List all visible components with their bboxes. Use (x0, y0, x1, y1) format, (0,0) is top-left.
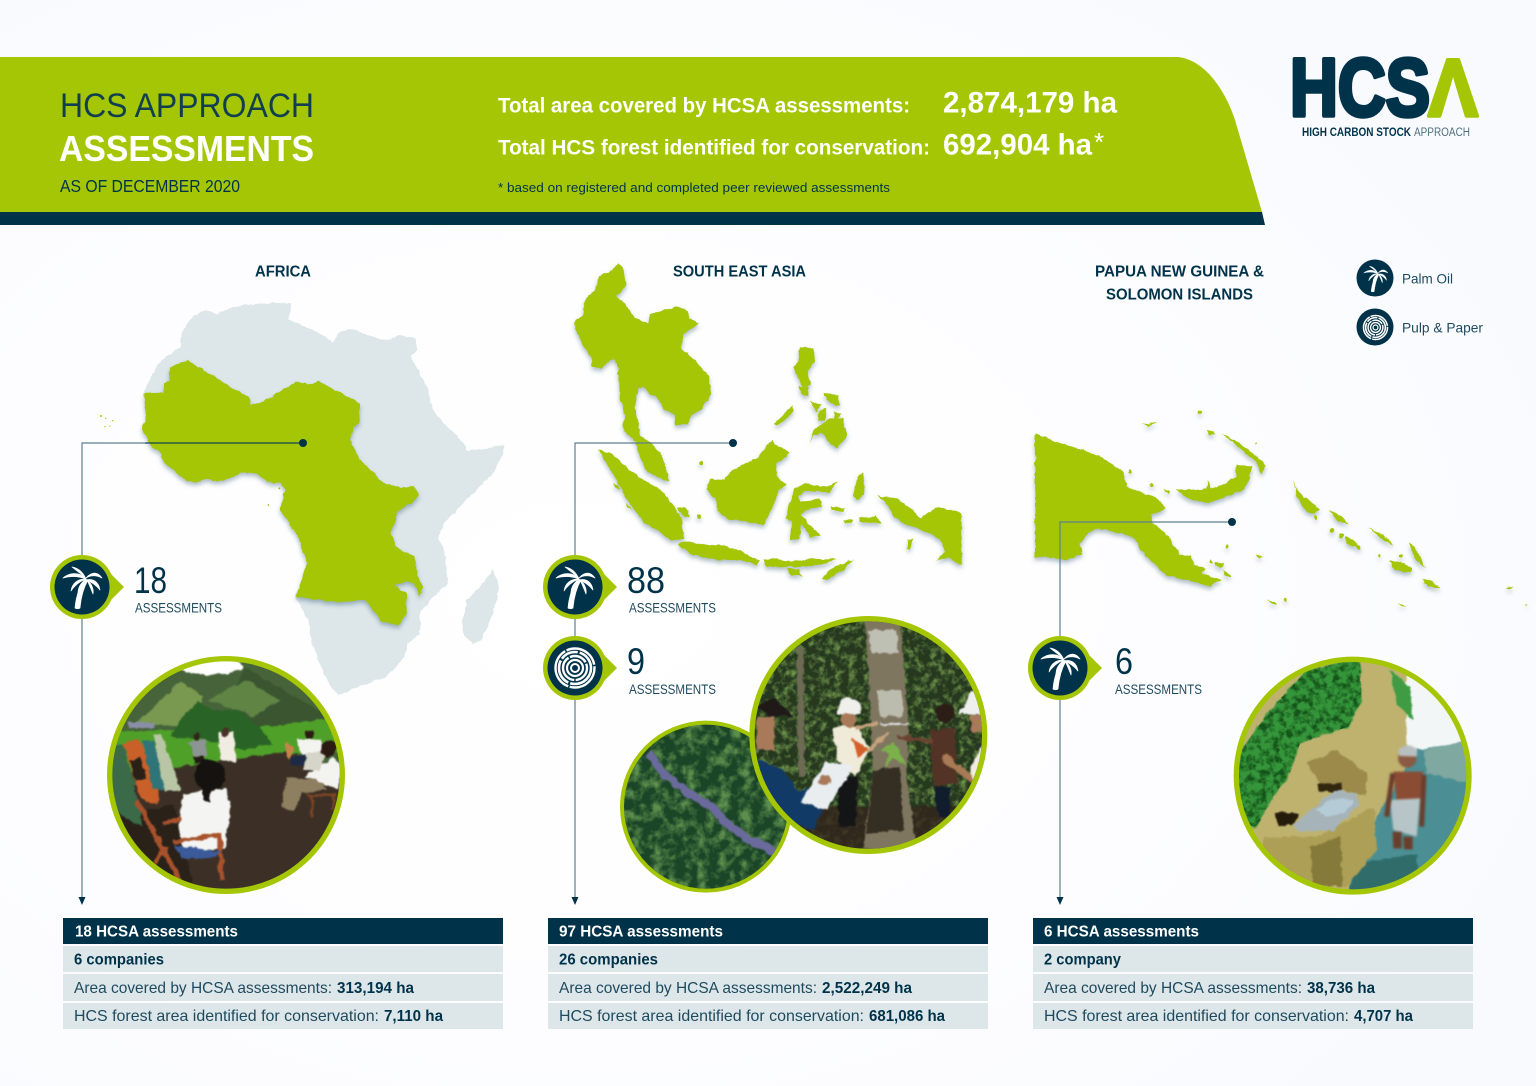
headline totals: 692,904 ha (943, 128, 1092, 162)
table: South East Asia: 97 HCSA assessments (559, 924, 723, 940)
table: Africa: Area covered by HCSA assessments: (74, 980, 332, 997)
headline totals: * based on registered and completed peer reviewed assessments (498, 180, 891, 195)
badge: Africa palm oil: 18 (134, 560, 167, 601)
map: Papua New Guinea and Solomon Islands (1035, 411, 1527, 609)
woman in white from behind (194, 759, 226, 791)
table: Africa (63, 918, 503, 1029)
man (1398, 749, 1417, 768)
table: Papua New Guinea and Solomon Islands: 2 company (1044, 952, 1121, 968)
seated women (112, 744, 143, 827)
title: HCS APPROACH (60, 87, 314, 125)
table: Africa: 7,110 ha (384, 1008, 443, 1025)
wicker chair (137, 802, 222, 880)
headline totals (498, 86, 1117, 195)
badge: South East Asia palm oil (543, 555, 716, 619)
logo: HCS (1290, 42, 1430, 134)
badge: Africa palm oil (50, 555, 222, 619)
badge: South East Asia pulp and paper (543, 636, 716, 700)
headline totals: 2,874,179 ha (943, 86, 1117, 120)
surveyor in white (837, 697, 862, 715)
headline totals: Total HCS forest identified for conservation: (498, 136, 930, 160)
leader line: South East Asia (572, 439, 737, 905)
logo: HIGH CARBON STOCK (1302, 127, 1412, 139)
table: South East Asia: 26 companies (559, 952, 658, 968)
badge: Papua New Guinea palm oil: 6 (1115, 641, 1133, 682)
legend (1356, 260, 1483, 346)
map: Africa (100, 303, 503, 695)
badge: South East Asia palm oil: 88 (627, 560, 665, 601)
map: South East Asia (573, 263, 962, 580)
table: Papua New Guinea and Solomon Islands: Area covered by HCSA assessments: (1044, 980, 1302, 997)
legend: palm oil: Palm Oil (1402, 270, 1453, 286)
measuring tool (880, 722, 908, 727)
badge: South East Asia palm oil: ASSESSMENTS (629, 600, 716, 616)
highlighted countries (142, 360, 423, 625)
badge: Papua New Guinea palm oil (1028, 636, 1202, 700)
legend: pulp and paper: Pulp & Paper (1402, 320, 1483, 336)
region heading: Papua New Guinea and Solomon Islands: PAPUA NEW GUINEA & (1095, 264, 1264, 280)
table: Africa: 313,194 ha (337, 980, 414, 997)
man with cap and clipboard (757, 697, 793, 717)
table: Africa: 6 companies (74, 952, 164, 968)
leader line: Africa (78, 439, 307, 905)
logo: APPROACH (1414, 127, 1470, 139)
seated central men (189, 740, 207, 757)
photo: aerial forest (620, 720, 793, 893)
table: South East Asia: HCS forest area identified for conservation: (559, 1008, 864, 1025)
badge: South East Asia pulp and paper: ASSESSMENTS (629, 682, 716, 697)
table: South East Asia: 681,086 ha (869, 1008, 945, 1025)
table: Papua New Guinea and Solomon Islands (1033, 918, 1473, 1029)
table: South East Asia: 2,522,249 ha (822, 980, 912, 997)
table: Papua New Guinea and Solomon Islands: HCS forest area identified for conservation: (1044, 1008, 1349, 1025)
region heading: South East Asia: SOUTH EAST ASIA (673, 264, 806, 280)
region heading: Papua New Guinea and Solomon Islands (1095, 264, 1264, 304)
men on the right (297, 738, 322, 756)
table: Papua New Guinea and Solomon Islands: 4,707 ha (1354, 1008, 1413, 1025)
table: Africa: HCS forest area identified for conservation: (74, 1008, 379, 1025)
table: Africa: 18 HCSA assessments (75, 924, 238, 940)
badge: Africa palm oil: ASSESSMENTS (135, 600, 222, 616)
photo: forest field survey (749, 616, 990, 863)
region heading: Africa: AFRICA (255, 264, 311, 280)
table: South East Asia: Area covered by HCSA assessments: (559, 980, 817, 997)
headline totals: * (1094, 127, 1104, 157)
header banner (0, 57, 1265, 225)
region heading: Papua New Guinea and Solomon Islands: SOLOMON ISLANDS (1106, 286, 1253, 304)
badge: South East Asia pulp and paper: 9 (627, 641, 645, 682)
man at right edge (958, 690, 980, 716)
table: Papua New Guinea and Solomon Islands: 38,736 ha (1307, 980, 1375, 997)
leader line: Papua New Guinea (1056, 518, 1236, 905)
photo: man beside river (1230, 653, 1477, 900)
photo: community meeting (107, 656, 345, 894)
table: Papua New Guinea and Solomon Islands: 6 HCSA assessments (1044, 924, 1199, 940)
fern (880, 742, 907, 770)
badge: Papua New Guinea palm oil: ASSESSMENTS (1115, 682, 1202, 697)
title: ASSESSMENTS (59, 128, 314, 169)
table: South East Asia (548, 918, 988, 1029)
headline totals: Total area covered by HCSA assessments: (498, 94, 910, 118)
title: AS OF DECEMBER 2020 (60, 176, 240, 196)
title (59, 87, 314, 196)
man reaching to tree (936, 704, 954, 723)
logo: Λ (1428, 43, 1478, 134)
